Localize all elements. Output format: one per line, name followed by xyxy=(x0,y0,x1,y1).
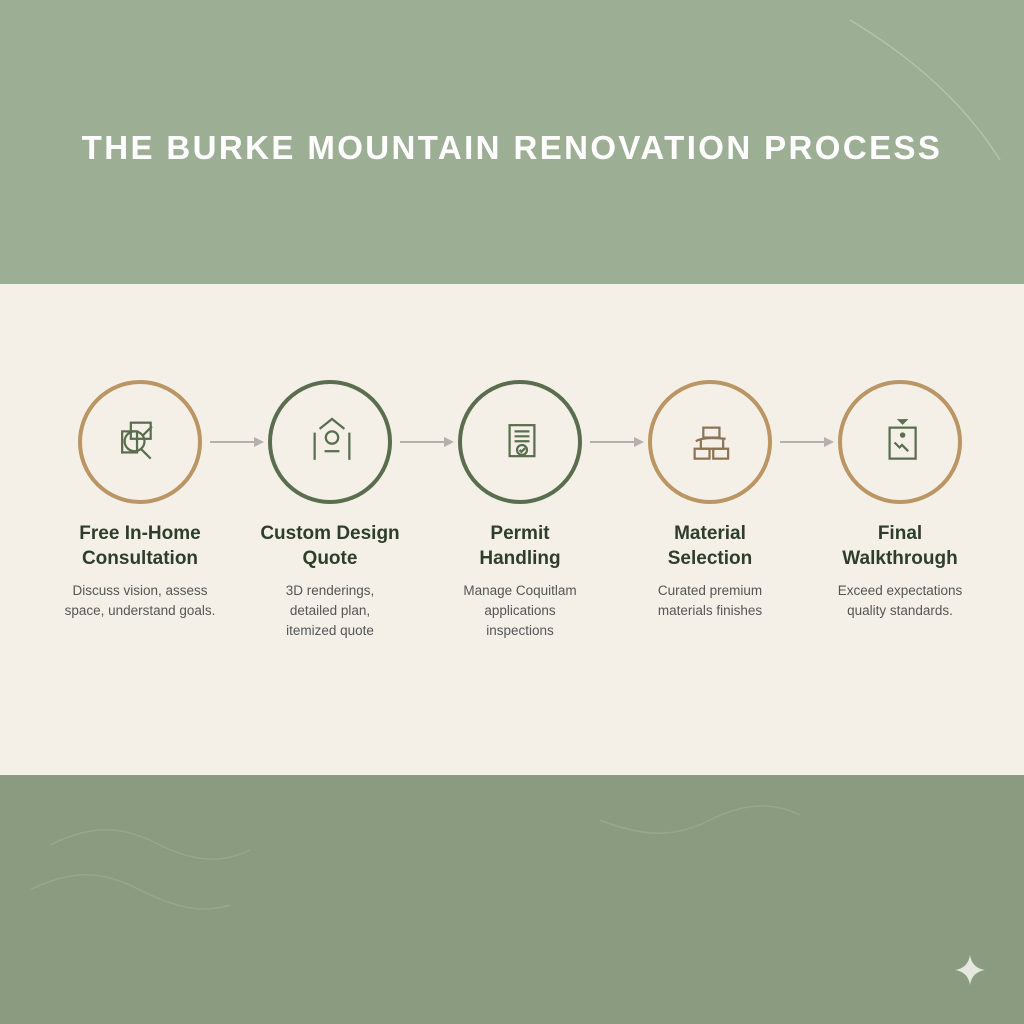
step 2 xyxy=(260,380,400,638)
step 2: 3D renderings, xyxy=(286,583,374,598)
bottom band xyxy=(0,775,1024,1024)
step 1: Discuss vision, assess xyxy=(72,583,208,598)
step 3: Permit xyxy=(490,523,550,544)
step 4: Curated premium xyxy=(658,583,762,598)
step 2: itemized quote xyxy=(286,623,374,638)
top band xyxy=(0,0,1024,284)
step 3 xyxy=(458,380,582,638)
arrow 2 xyxy=(400,437,454,447)
arrow 3 xyxy=(590,437,644,447)
step 5: Exceed expectations xyxy=(838,583,962,598)
icon circle 5 xyxy=(838,380,962,504)
step 5: Walkthrough xyxy=(842,548,958,569)
step 4: materials finishes xyxy=(658,603,762,618)
arrow 4 xyxy=(780,437,834,447)
step 4: Selection xyxy=(668,548,752,569)
step 3: inspections xyxy=(486,623,554,638)
step 1: space, understand goals. xyxy=(65,603,215,618)
step 1: Consultation xyxy=(82,548,198,569)
icon circle 3 xyxy=(458,380,582,504)
step 5: Final xyxy=(878,523,922,544)
step 5 xyxy=(838,380,962,618)
step 1: Free In-Home xyxy=(79,523,201,544)
arrow 1 xyxy=(210,437,264,447)
step 3: applications xyxy=(484,603,556,618)
icon circle 4 xyxy=(648,380,772,504)
title: THE BURKE MOUNTAIN RENOVATION PROCESS xyxy=(82,129,942,166)
icon: sparkle xyxy=(955,955,985,985)
step 2: Quote xyxy=(303,548,357,569)
step 5: quality standards. xyxy=(847,603,953,618)
step 1 xyxy=(65,380,215,618)
step 3: Handling xyxy=(479,548,561,569)
step 3: Manage Coquitlam xyxy=(463,583,577,598)
step 4 xyxy=(648,380,772,618)
step 2: Custom Design xyxy=(260,523,400,544)
step 2: detailed plan, xyxy=(290,603,370,618)
icon circle 1 xyxy=(78,380,202,504)
step 4: Material xyxy=(674,523,746,544)
icon circle 2 xyxy=(268,380,392,504)
